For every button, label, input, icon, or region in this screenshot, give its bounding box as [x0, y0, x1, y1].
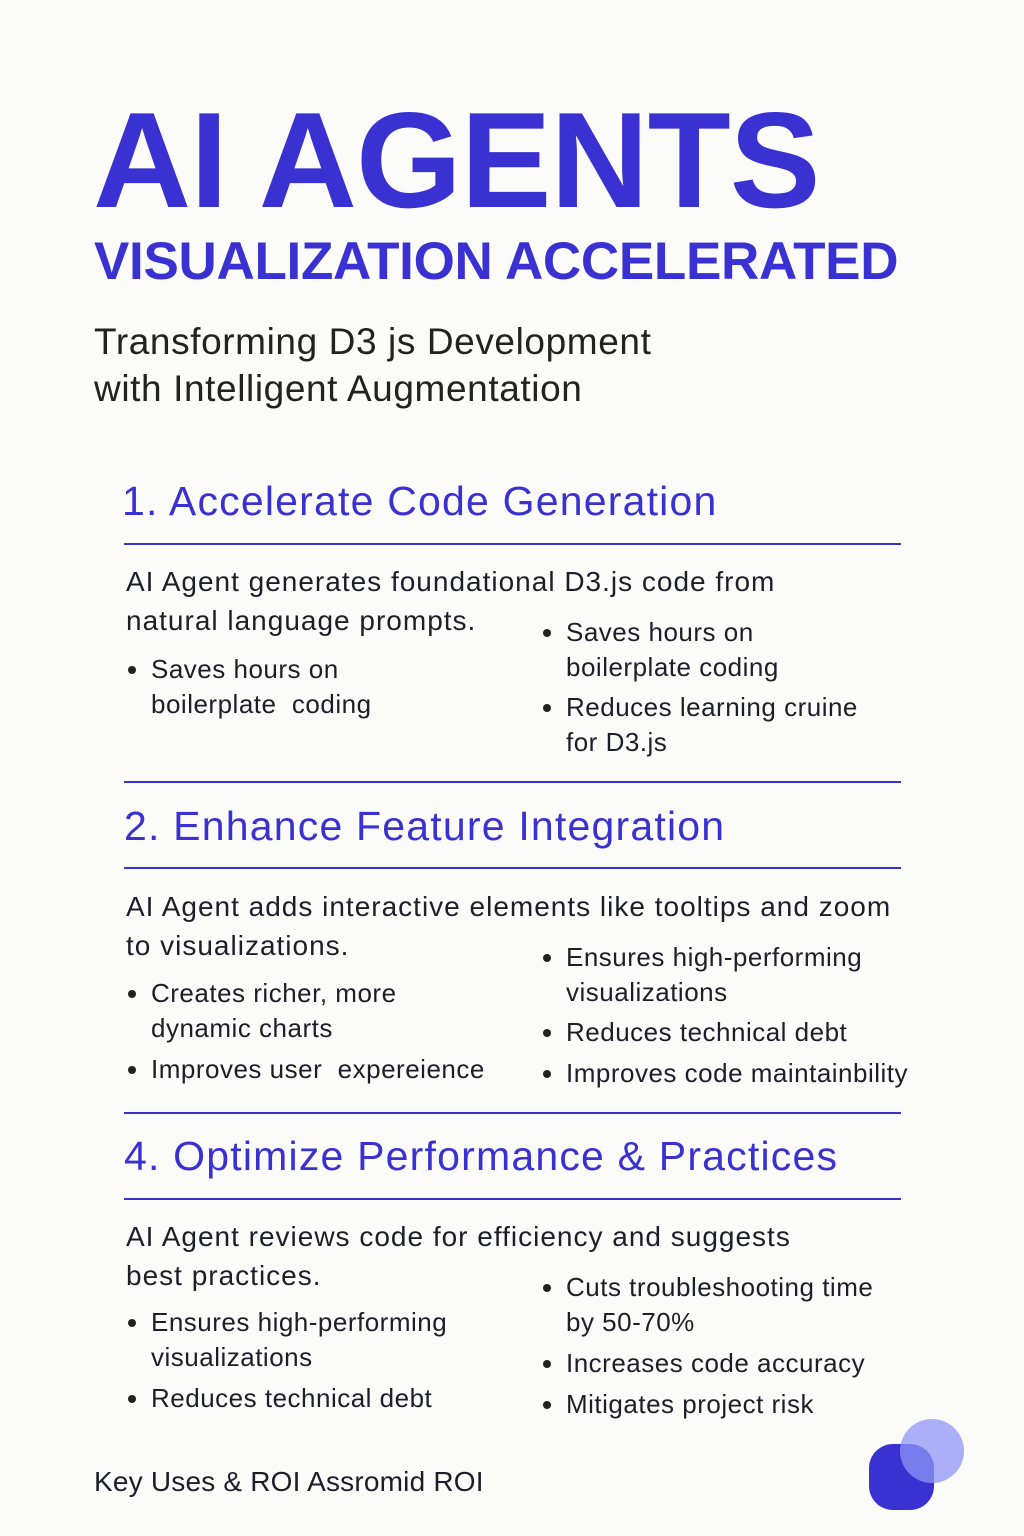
- bullets 4 left: Reduces technical debt: [151, 1383, 432, 1413]
- section 2: [124, 803, 908, 1114]
- text 4: [126, 1221, 791, 1291]
- text 1: [126, 566, 775, 636]
- subtitle: VISUALIZATION ACCELERATED: [94, 232, 898, 291]
- bullets 2 right: Improves code maintainbility: [566, 1058, 908, 1088]
- bullets 1 right: for D3.js: [566, 727, 667, 757]
- bullets 4 left: [128, 1307, 447, 1413]
- tagline: with Intelligent Augmentation: [94, 368, 582, 409]
- bullets 4 right: Cuts troubleshooting time: [566, 1272, 873, 1302]
- text 2: [126, 891, 891, 961]
- bullets 1 left: boilerplate coding: [151, 689, 372, 719]
- bullets 2 right: [543, 942, 908, 1088]
- bullets 1 right: Reduces learning cruine: [566, 692, 858, 722]
- bullets 2 right: visualizations: [566, 977, 728, 1007]
- title: AI AGENTS: [93, 84, 819, 236]
- section 1: [122, 478, 901, 783]
- bullets 1 left: [128, 654, 372, 719]
- bullets 4 left: Ensures high-performing: [151, 1307, 447, 1337]
- footer text: Key Uses & ROI Assromid ROI: [94, 1466, 484, 1497]
- heading 4: 4. Optimize Performance & Practices: [124, 1133, 838, 1179]
- section 4: [124, 1133, 901, 1419]
- bullets 4 left: visualizations: [151, 1342, 313, 1372]
- bullets 1 right: boilerplate coding: [566, 652, 779, 682]
- bullets 4 right: by 50-70%: [566, 1307, 695, 1337]
- text 4: AI Agent reviews code for efficiency and suggests: [126, 1221, 791, 1252]
- text 2: to visualizations.: [126, 930, 349, 961]
- bullets 2 left: [128, 978, 485, 1084]
- heading 1: 1. Accelerate Code Generation: [122, 478, 718, 524]
- bullets 2 right: Reduces technical debt: [566, 1017, 847, 1047]
- tagline: Transforming D3 js Development: [94, 321, 651, 362]
- bullets 2 left: Creates richer, more: [151, 978, 397, 1008]
- text 1: AI Agent generates foundational D3.js code from: [126, 566, 775, 597]
- bullets 1 left: Saves hours on: [151, 654, 339, 684]
- tagline: [94, 321, 651, 409]
- bullets 4 right: [543, 1272, 873, 1419]
- icon: overlapping shapes: [869, 1419, 964, 1510]
- heading 2: 2. Enhance Feature Integration: [124, 803, 725, 849]
- bullets 2 left: dynamic charts: [151, 1013, 333, 1043]
- bullets 1 right: [543, 617, 858, 757]
- bullets 4 right: Mitigates project risk: [566, 1389, 814, 1419]
- bullets 4 right: Increases code accuracy: [566, 1348, 865, 1378]
- text 1: natural language prompts.: [126, 605, 476, 636]
- bullets 1 right: Saves hours on: [566, 617, 754, 647]
- text 4: best practices.: [126, 1260, 322, 1291]
- text 2: AI Agent adds interactive elements like tooltips and zoom: [126, 891, 891, 922]
- bullets 2 right: Ensures high-performing: [566, 942, 862, 972]
- bullets 2 left: Improves user expereience: [151, 1054, 485, 1084]
